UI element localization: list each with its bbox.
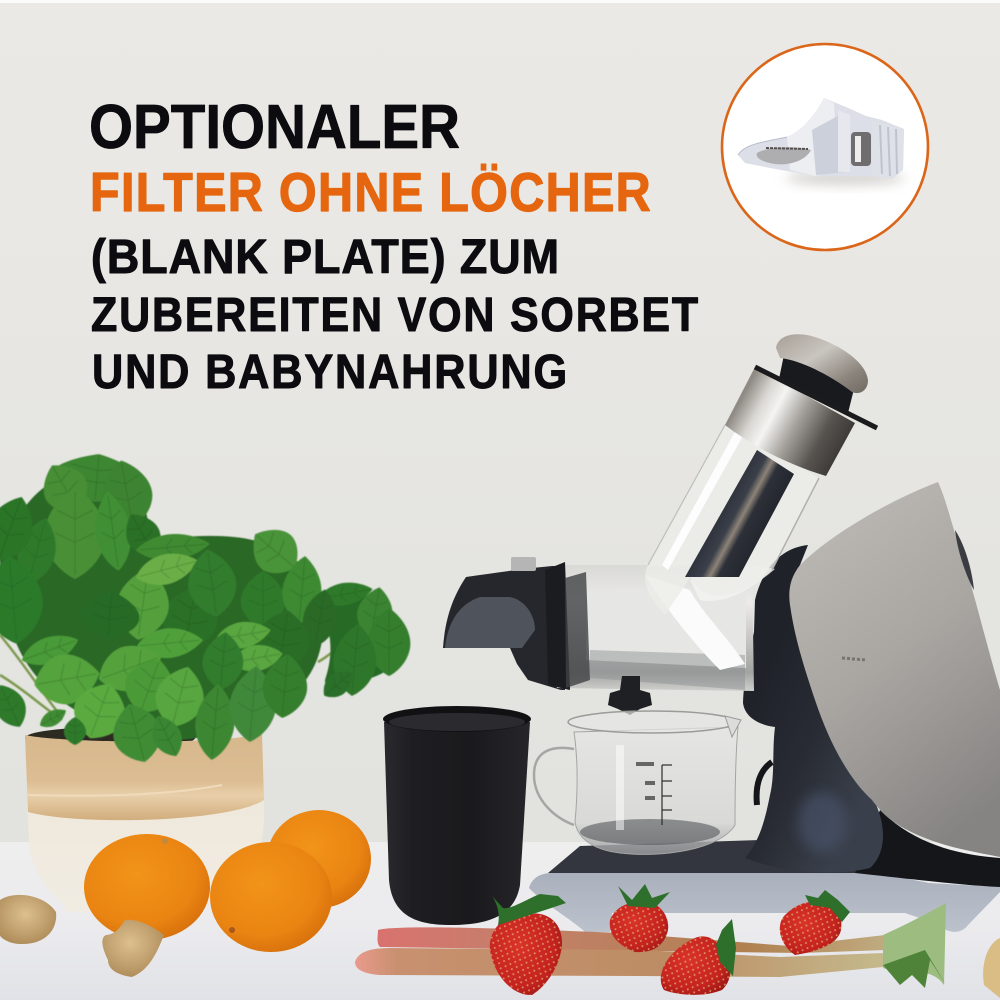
rhubarb stalks	[355, 903, 946, 988]
jug body	[574, 727, 738, 854]
icon: filter part	[738, 98, 904, 179]
filter shadow	[785, 171, 905, 185]
leaf canopy shadow	[0, 470, 324, 740]
top light edge	[0, 0, 1000, 3]
jug scale	[662, 765, 672, 825]
juicer valve	[608, 676, 652, 715]
physalis husks	[0, 895, 1000, 998]
oranges	[84, 810, 371, 952]
strawberry 4	[780, 890, 850, 955]
orange front	[210, 842, 332, 952]
subheading line 4: ZUBEREITEN VON SORBET	[91, 289, 700, 342]
subheading line 3: (BLANK PLATE) ZUM	[91, 231, 560, 284]
juicer flange	[755, 367, 877, 428]
jug base shadow	[580, 819, 720, 845]
strawberry 2	[610, 884, 670, 952]
juicer spout	[443, 566, 565, 690]
table surface	[0, 842, 1000, 1000]
juicer dark body	[743, 545, 883, 872]
pot lower white	[27, 800, 264, 913]
flower pot	[25, 727, 264, 913]
juicer metal collar	[725, 367, 855, 476]
rhubarb back stalk	[378, 903, 946, 953]
stems	[0, 555, 345, 720]
heading line 2 orange: FILTER OHNE LÖCHER	[90, 161, 652, 223]
juicer base plate	[529, 873, 1000, 932]
pot soil	[25, 727, 195, 749]
heading line 1: OPTIONALER	[89, 93, 460, 162]
juicer black rear band	[855, 810, 1000, 887]
husk left	[0, 895, 56, 944]
rhubarb front stalk	[355, 948, 883, 977]
orange back	[267, 810, 371, 908]
pot wood band	[25, 733, 264, 820]
spout knob	[511, 557, 536, 571]
strawberry 3	[661, 919, 736, 995]
strawberries	[490, 884, 850, 995]
leaves	[0, 450, 410, 768]
orange left	[84, 834, 210, 940]
juicer neck	[779, 345, 855, 413]
husk right edge	[983, 938, 1000, 998]
title text block	[89, 93, 700, 399]
jug handle	[534, 748, 574, 825]
circle callout: blank plate filter	[722, 44, 928, 250]
juicer cap	[776, 334, 868, 393]
jug spout	[725, 716, 741, 737]
husk centre	[102, 920, 164, 977]
glass jug	[534, 711, 741, 854]
subheading line 5: UND BABYNAHRUNG	[92, 346, 569, 399]
basil plant	[0, 450, 410, 768]
jug rim	[568, 711, 736, 733]
strawberry 1	[490, 894, 566, 995]
juicer silver shell	[789, 482, 1000, 857]
black cup	[383, 706, 531, 925]
juicer barrel	[550, 565, 754, 691]
rhubarb leaves	[883, 903, 946, 985]
juicer	[443, 334, 1000, 932]
juicer feed tube	[645, 425, 819, 615]
